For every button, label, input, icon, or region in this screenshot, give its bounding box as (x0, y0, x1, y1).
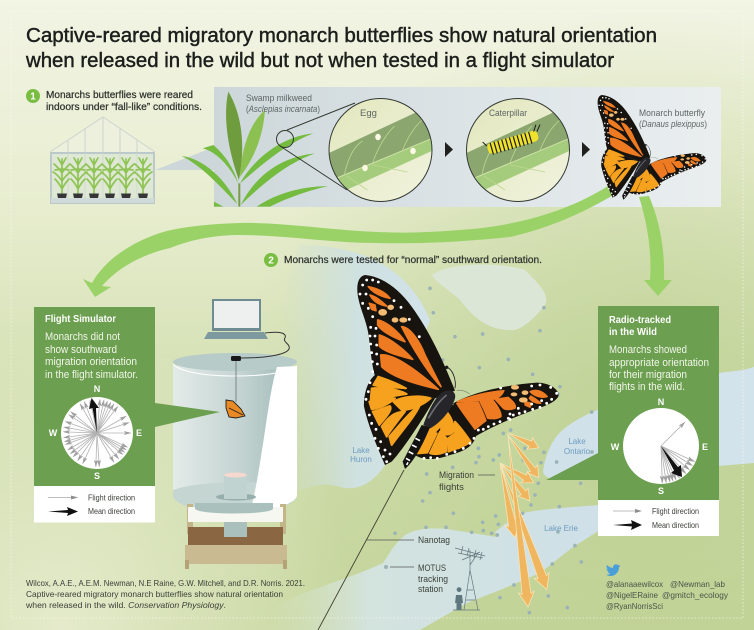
lake: Ontario (543, 408, 602, 480)
citation: Captive-reared migratory monarch butterflies show natural orientation (26, 589, 283, 599)
step 1 label: Monarchs butterflies were reared (46, 89, 193, 101)
step 1 label (26, 89, 202, 113)
lake: Erie (270, 505, 600, 630)
legend: radio-tracked (613, 507, 699, 530)
tether and camera (231, 332, 289, 402)
circle: caterpillar: Caterpillar (489, 108, 527, 119)
panel: radio-tracked: flights in the wild. (609, 381, 685, 393)
panel: flight simulator: Monarchs did not (45, 331, 120, 343)
labels on map: Lake Erie (544, 524, 578, 533)
twitter handles: @alanaaewilcox (606, 579, 664, 589)
plant: swamp milkweed (182, 92, 328, 207)
compass: flight simulator: W (49, 428, 58, 438)
panel: radio-tracked: Monarchs showed (609, 344, 687, 356)
twitter handles: @gmitch_ecology (662, 590, 729, 600)
panel: radio-tracked: appropriate orientation (609, 357, 709, 369)
panel: life cycle strip (155, 87, 721, 207)
compass: radio-tracked: S (658, 486, 664, 496)
step 1 label: 1 (30, 92, 36, 102)
compass: flight simulator (49, 384, 142, 481)
panel: flight simulator (34, 307, 220, 522)
panel: radio-tracked: for their migration (609, 369, 687, 381)
panel: radio-tracked: Radio-tracked (609, 315, 671, 326)
citation (25, 578, 305, 610)
arrow (445, 142, 453, 157)
text: monarch butterfly: (Danaus plexippus) (639, 119, 707, 130)
circle: caterpillar (466, 98, 570, 202)
compass: flight simulator: S (94, 471, 100, 481)
twitter handles: @RyanNorrisSci (606, 601, 663, 611)
legend: radio-tracked: Mean direction (652, 521, 699, 530)
map dots: MOTUS stations (395, 288, 612, 613)
icon: tracking tower and person (453, 546, 485, 610)
compass: radio-tracked: N (658, 397, 664, 407)
label: MOTUS: station (418, 584, 443, 595)
panel: flight simulator: in the flight simulator. (45, 369, 138, 381)
legend: flight simulator: Flight direction (88, 494, 135, 502)
arrow (582, 142, 590, 157)
labels on map: Lake (568, 437, 586, 446)
nanotag line and label: Nanotag (418, 535, 450, 546)
twitter handles: @NigelERaine (606, 590, 658, 600)
pedestal (216, 472, 256, 500)
step 2 label: 2 (268, 256, 274, 266)
text: swamp milkweed: Swamp milkweed (246, 93, 312, 104)
laptop and simulator (173, 299, 297, 569)
labels on map: Ontario (564, 447, 591, 456)
zoom lens on leaf (276, 103, 355, 190)
label: MOTUS: tracking (418, 574, 448, 585)
arrow: to radio-tracked (639, 196, 672, 296)
labels on map: Huron (350, 455, 372, 464)
text: monarch butterfly (639, 108, 707, 130)
text: swamp milkweed (246, 93, 320, 115)
migration flight arrows (492, 427, 554, 608)
title: when released in the wild but not when tested in a flight simulator (25, 49, 614, 72)
compass: radio-tracked (611, 397, 708, 496)
wooden stand (185, 503, 287, 569)
icon: greenhouse (50, 117, 155, 203)
lake: upper right (718, 367, 754, 466)
icon: twitter (606, 564, 620, 576)
icon: laptop (204, 299, 268, 339)
panel: flight simulator: show southward (45, 344, 117, 356)
big monarch (357, 275, 558, 469)
title (25, 24, 657, 72)
text: monarch butterfly: Monarch butterfly (639, 108, 705, 119)
step 1 label: indoors under “fall-like” conditions. (46, 101, 202, 113)
cylinder (173, 353, 297, 513)
icon: small monarch (598, 95, 706, 200)
title: Captive-reared migratory monarch butterflies show natural orientation (26, 24, 657, 47)
panel: flight simulator: migration orientation (45, 356, 137, 368)
citation: when released in the wild. Conservation Physiology. (25, 600, 226, 610)
legend: radio-tracked: Flight direction (652, 507, 699, 516)
lake: Huron (282, 245, 430, 495)
circle: egg: Egg (360, 108, 377, 119)
label: migration flights: Migration (439, 470, 474, 481)
label: MOTUS: MOTUS (418, 563, 446, 574)
panel: radio-tracked: in the Wild (609, 327, 657, 338)
legend: flight simulator: Mean direction (88, 507, 135, 516)
citation: Wilcox, A.A.E., A.E.M. Newman, N.E Raine, G.W. Mitchell, and D.R. Norris. 2021. (26, 578, 305, 588)
step 2 label: Monarchs were tested for “normal” southward orientation. (284, 254, 542, 266)
legend: flight simulator (48, 494, 135, 516)
label: migration flights: flights (439, 482, 464, 493)
icon: tethered butterfly (226, 400, 245, 418)
arrow: to flight simulator (83, 186, 615, 297)
compass: flight simulator: E (136, 428, 142, 438)
label: migration flights (439, 470, 495, 493)
compass: radio-tracked: E (702, 442, 708, 452)
panel: radio-tracked (546, 306, 719, 536)
compass: flight simulator: N (94, 384, 100, 394)
twitter handles (606, 579, 729, 611)
circle: egg (328, 98, 432, 202)
panel: flight simulator: Flight Simulator (45, 314, 116, 325)
labels on map (350, 437, 591, 533)
compass: radio-tracked: W (611, 442, 620, 452)
twitter handles: @Newman_lab (670, 579, 725, 589)
text: swamp milkweed: (Asclepias incarnata) (246, 104, 320, 115)
labels on map: Lake (352, 446, 370, 455)
label: MOTUS (390, 563, 448, 595)
nanotag line and label (318, 470, 450, 630)
